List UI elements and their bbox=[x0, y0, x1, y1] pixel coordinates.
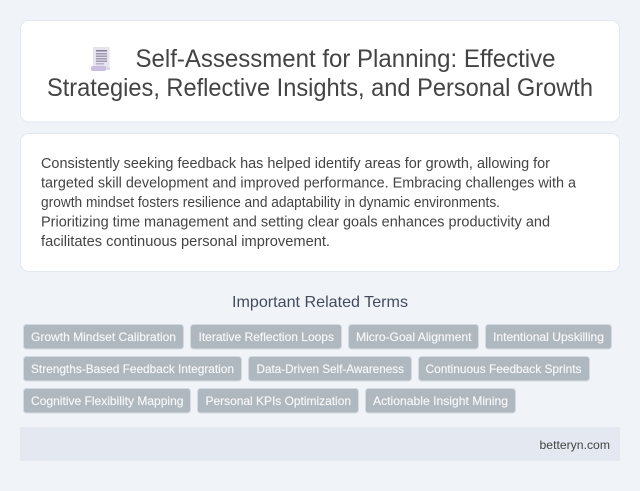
tag: data-driven self-awareness: Data-Driven Self-Awareness bbox=[256, 362, 404, 376]
tag: actionable insight mining bbox=[366, 388, 516, 413]
tag: continuous feedback sprints: Continuous Feedback Sprints bbox=[426, 362, 582, 376]
summary text: Consistently seeking feedback has helped identify areas for growth, allowing for bbox=[41, 156, 550, 172]
tag: strengths-based feedback integration bbox=[24, 356, 242, 381]
footer source: betteryn.com bbox=[540, 438, 610, 452]
tag: growth mindset calibration bbox=[24, 324, 184, 349]
tag: continuous feedback sprints bbox=[418, 356, 590, 381]
summary text: facilitates continuous personal improvement. bbox=[41, 234, 330, 250]
tag: cognitive flexibility mapping: Cognitive Flexibility Mapping bbox=[31, 394, 184, 408]
summary text: growth mindset fosters resilience and adaptability in dynamic environments. bbox=[41, 195, 500, 211]
tag: actionable insight mining: Actionable Insight Mining bbox=[373, 394, 508, 408]
tag: intentional upskilling bbox=[486, 324, 612, 349]
tags bbox=[24, 324, 612, 413]
panel: summary paragraph bbox=[20, 134, 620, 272]
footer bar bbox=[20, 427, 620, 461]
tag: strengths-based feedback integration: Strengths-Based Feedback Integration bbox=[31, 362, 234, 376]
tag: data-driven self-awareness bbox=[248, 356, 412, 381]
tag: growth mindset calibration: Growth Mindset Calibration bbox=[31, 330, 176, 344]
panel: title card bbox=[20, 20, 620, 122]
icon: document scroll bbox=[91, 47, 110, 71]
title bbox=[47, 45, 593, 102]
heading: important related terms: Important Related Terms bbox=[232, 294, 408, 311]
summary text: Prioritizing time management and setting clear goals enhances productivity and bbox=[41, 214, 550, 230]
summary text bbox=[41, 156, 577, 250]
tag: micro-goal alignment: Micro-Goal Alignment bbox=[356, 330, 472, 344]
title: Self-Assessment for Planning: Effective bbox=[136, 45, 556, 73]
tag: iterative reflection loops: Iterative Reflection Loops bbox=[198, 330, 334, 344]
tag: cognitive flexibility mapping bbox=[24, 388, 190, 413]
summary text: targeted skill development and improved performance. Embracing challenges with a bbox=[41, 176, 577, 192]
title: Strategies, Reflective Insights, and Personal Growth bbox=[47, 74, 593, 102]
tag: intentional upskilling: Intentional Upskilling bbox=[493, 330, 604, 344]
tag: personal kpis optimization: Personal KPIs Optimization bbox=[206, 394, 351, 408]
tag: micro-goal alignment bbox=[348, 324, 478, 349]
tag: personal kpis optimization bbox=[198, 388, 358, 413]
tag: iterative reflection loops bbox=[190, 324, 342, 349]
